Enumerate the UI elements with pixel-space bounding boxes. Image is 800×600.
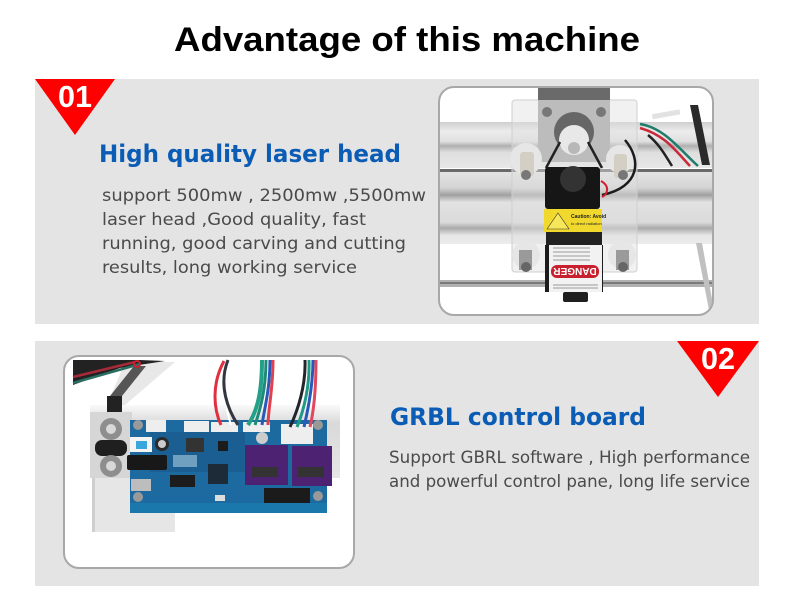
heading: high quality laser head: High quality laser head — [99, 140, 401, 168]
photo: laser head: to direct radiation — [571, 221, 602, 226]
badge: 01: 01 — [58, 79, 92, 114]
photo: laser head — [439, 87, 714, 315]
PCB — [130, 420, 327, 509]
text block: control board description: and powerful control pane, long life service — [389, 472, 750, 492]
text block: laser head description: laser head ,Good quality, fast — [102, 210, 366, 230]
badge: 02 — [677, 341, 759, 397]
text block: laser head description: results, long working service — [102, 258, 357, 278]
wires — [215, 361, 224, 425]
heading: GRBL control board: GRBL control board — [390, 403, 646, 431]
cable — [602, 140, 635, 195]
text block: control board description: Support GBRL software , High performance — [389, 448, 750, 468]
drivers — [245, 445, 288, 485]
text block: laser head description: support 500mw , 2500mw ,5500mw — [102, 186, 426, 206]
extrusion end — [90, 412, 132, 478]
title: Advantage of this machine — [174, 21, 640, 59]
USB port — [131, 479, 151, 491]
wheels — [510, 143, 636, 269]
fan — [545, 167, 600, 209]
lower plate — [92, 478, 175, 532]
photo: control board — [64, 356, 354, 568]
belt — [546, 142, 602, 168]
badge: 02: 02 — [701, 341, 735, 376]
motor — [538, 88, 610, 100]
right carriage and wires — [690, 105, 710, 165]
laser module — [544, 209, 602, 232]
photo: laser head: DANGER — [553, 265, 597, 276]
diagonal arm and cables — [107, 362, 175, 405]
text block: laser head description — [102, 186, 426, 278]
connectors — [146, 420, 166, 432]
chips — [170, 475, 195, 487]
switch and jack — [130, 437, 152, 452]
rail — [90, 405, 340, 478]
panel: laser head — [35, 79, 759, 324]
badge: 01 — [35, 79, 115, 135]
photo: laser head: Caution: Avoid — [571, 214, 606, 220]
text block: control board description — [389, 448, 750, 492]
panel: control board — [35, 341, 759, 586]
text block: laser head description: running, good carving and cutting — [102, 234, 406, 254]
acrylic plate — [512, 100, 637, 272]
header connector — [264, 488, 310, 503]
